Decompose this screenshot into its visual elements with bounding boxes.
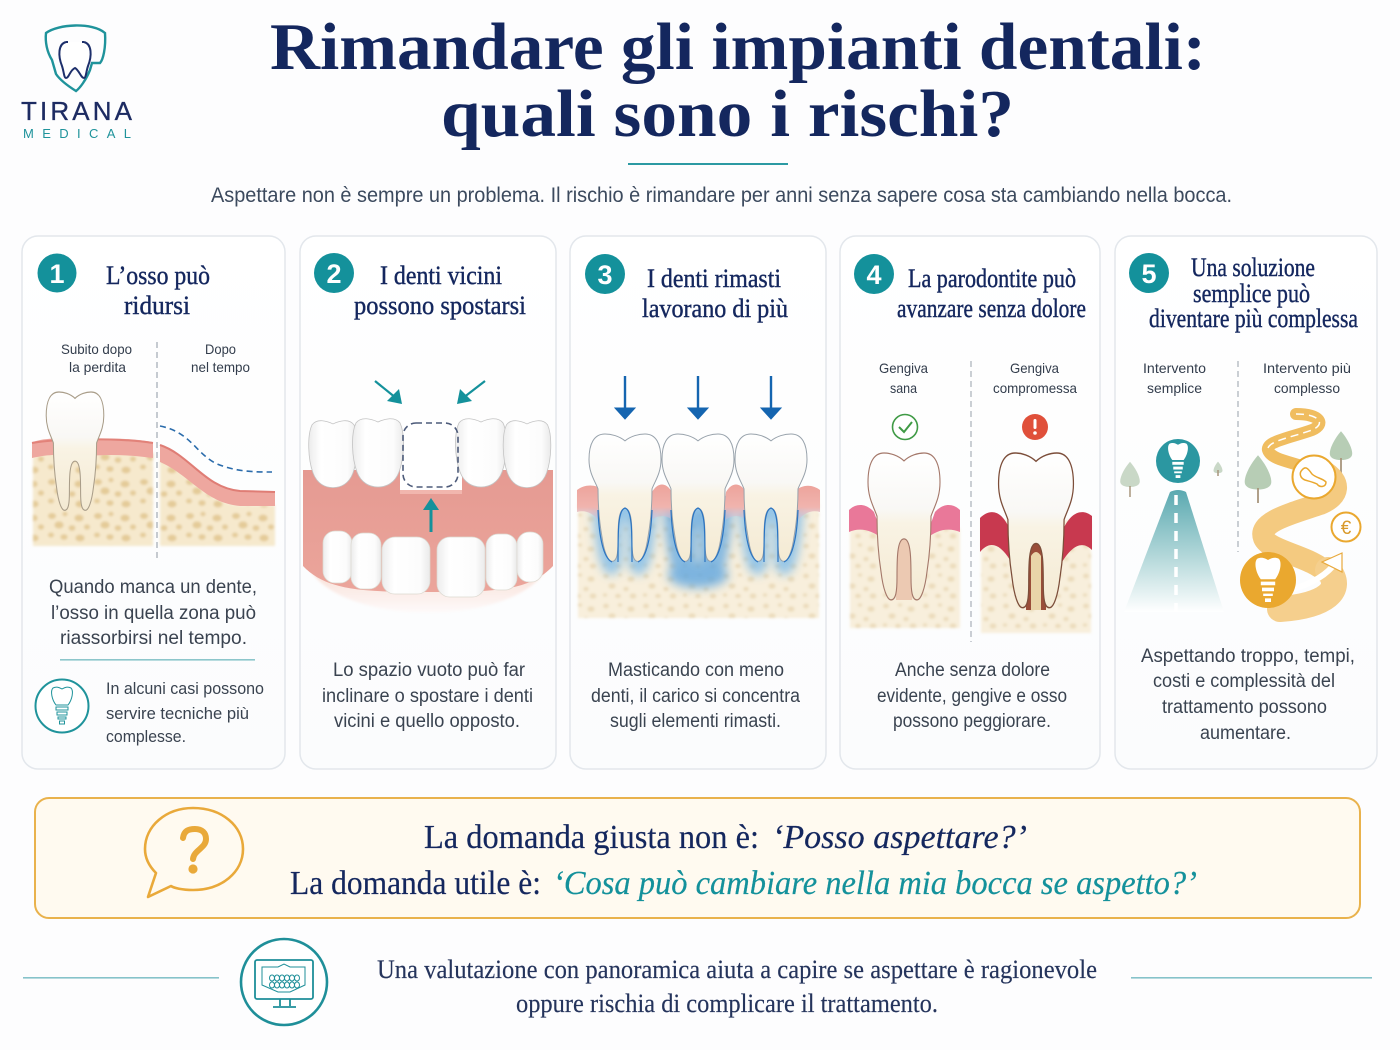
body text 5: Aspettando troppo, tempi, — [1141, 646, 1355, 667]
column labels: Dopo — [205, 341, 236, 357]
heading 1 — [106, 260, 210, 320]
closing text — [377, 955, 1097, 1018]
title underline — [628, 163, 788, 165]
subtitle: Aspettare non è sempre un problema. Il rischio è rimandare per anni senza sapere cosa sta cambiando nella bocca. — [211, 184, 1232, 207]
heading 5: diventare più complessa — [1149, 303, 1358, 333]
note text: In alcuni casi possono — [106, 680, 264, 698]
step number 2 — [314, 253, 354, 293]
question line 1: La domanda giusta non è: — [424, 819, 759, 856]
logo — [21, 25, 133, 141]
closing text: oppure rischia di complicare il trattamento. — [516, 989, 938, 1018]
step number 5: 5 — [1141, 259, 1157, 289]
body text 5 — [1141, 646, 1355, 744]
question line 1: ‘Posso aspettare?’ — [772, 819, 1027, 856]
icon: question bubble — [145, 808, 243, 897]
note text: complesse. — [106, 728, 186, 746]
panel 2: neighbouring teeth — [300, 236, 556, 769]
body text 1 — [49, 577, 257, 649]
icon: panoramic x-ray monitor — [241, 939, 327, 1025]
body text 3: denti, il carico si concentra — [591, 686, 800, 707]
illustration: bone before and after — [32, 392, 275, 546]
heading 3: lavorano di più — [642, 293, 788, 323]
panel 1: bone — [22, 236, 285, 769]
closing text: Una valutazione con panoramica aiuta a capire se aspettare è ragionevole — [377, 955, 1097, 984]
heading 1: L’osso può — [106, 260, 210, 290]
illustration: compromised tooth — [980, 453, 1092, 633]
panel 3: overload — [570, 236, 826, 769]
body text 1: l’osso in quella zona può — [51, 603, 256, 624]
step number 3: 3 — [597, 260, 613, 290]
note text — [106, 680, 264, 746]
column labels: nel tempo — [191, 359, 250, 375]
column labels: Intervento più — [1263, 360, 1351, 376]
heading 5: Una soluzione — [1191, 252, 1315, 282]
illustration: stressed teeth — [577, 434, 820, 618]
panel 5: treatment complexity — [1115, 236, 1377, 769]
heading 4 — [897, 263, 1086, 323]
note text: servire tecniche più — [106, 705, 249, 723]
column labels: Gengiva — [879, 360, 928, 376]
body text 3: sugli elementi rimasti. — [610, 711, 781, 732]
body text 2 — [322, 660, 533, 732]
step number 4 — [854, 254, 894, 294]
body text 2: vicini e quello opposto. — [334, 711, 520, 732]
step number 3 — [585, 254, 625, 294]
callout: the right question — [35, 798, 1360, 918]
step number 1: 1 — [49, 259, 65, 289]
icon: healthy check — [892, 414, 918, 440]
heading 2: I denti vicini — [380, 260, 502, 290]
title: Rimandare gli impianti dentali: — [270, 10, 1206, 84]
title — [270, 10, 1206, 151]
heading 5 — [1149, 252, 1358, 333]
illustration: straight road — [1120, 439, 1224, 612]
question line 2 — [290, 865, 1197, 902]
column labels: Subito dopo — [61, 341, 132, 357]
body text 2: inclinare o spostare i denti — [322, 686, 533, 707]
heading 3 — [642, 263, 788, 323]
question line 1 — [424, 819, 1027, 856]
column labels — [61, 341, 250, 375]
title: quali sono i rischi? — [441, 77, 1014, 151]
illustration: winding road: € — [1341, 518, 1352, 539]
heading 3: I denti rimasti — [647, 263, 781, 293]
heading 4: avanzare senza dolore — [897, 293, 1086, 323]
column labels: sana — [890, 380, 917, 396]
body text 2: Lo spazio vuoto può far — [333, 660, 526, 681]
body text 3: Masticando con meno — [608, 660, 784, 681]
logo: MEDICAL — [23, 126, 131, 141]
illustration: winding road — [1240, 414, 1360, 609]
column labels: la perdita — [69, 359, 126, 375]
arrows: load — [615, 376, 781, 419]
illustration: healthy tooth — [849, 453, 960, 628]
step number 2: 2 — [326, 259, 342, 289]
step number 1 — [38, 254, 76, 292]
column labels: complesso — [1274, 380, 1340, 396]
illustration: mouth with gap — [303, 419, 553, 612]
body text 4 — [877, 660, 1067, 732]
heading 2 — [354, 260, 526, 320]
step number 4: 4 — [866, 260, 882, 290]
column labels: compromessa — [993, 380, 1077, 396]
column labels: Intervento — [1143, 360, 1206, 376]
heading 2: possono spostarsi — [354, 290, 526, 320]
body text 1: riassorbirsi nel tempo. — [60, 628, 247, 649]
body text 4: evidente, gengive e osso — [877, 686, 1067, 707]
step number 5 — [1129, 253, 1169, 293]
icon: alert — [1022, 414, 1048, 440]
body text 4: possono peggiorare. — [893, 711, 1051, 732]
icon: implant — [36, 680, 88, 732]
heading 1: ridursi — [124, 290, 190, 320]
body text 5: trattamento possono — [1162, 697, 1327, 718]
arrows: teeth drifting — [375, 381, 485, 532]
body text 5: costi e complessità del — [1153, 671, 1335, 692]
column labels — [879, 360, 1077, 396]
logo: TIRANA — [21, 96, 133, 126]
body text 4: Anche senza dolore — [895, 660, 1050, 681]
body text 1: Quando manca un dente, — [49, 577, 257, 598]
panel 4: periodontitis — [840, 236, 1100, 769]
body text 5: aumentare. — [1200, 723, 1291, 744]
question line 2: ‘Cosa può cambiare nella mia bocca se aspetto?’ — [553, 865, 1197, 902]
heading 4: La parodontite può — [908, 263, 1076, 293]
column labels: semplice — [1147, 380, 1202, 396]
column labels: Gengiva — [1010, 360, 1059, 376]
column labels — [1143, 360, 1351, 396]
question line 2: La domanda utile è: — [290, 865, 541, 902]
body text 3 — [591, 660, 800, 732]
heading 5: semplice può — [1193, 278, 1310, 308]
